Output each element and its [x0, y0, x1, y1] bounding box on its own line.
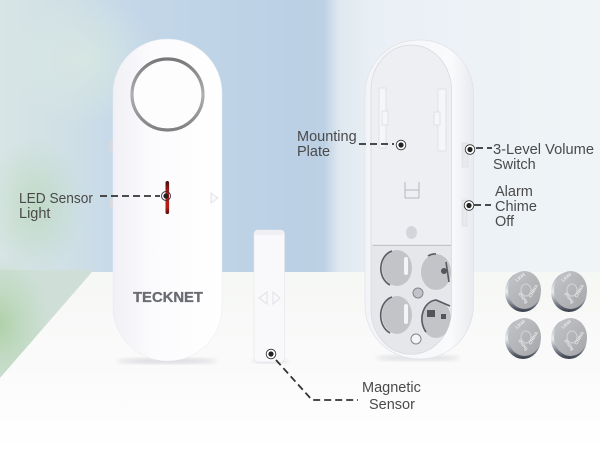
panel: back of alarm unit — [365, 40, 474, 360]
icon: right arrow mark — [211, 193, 218, 203]
panel: LR44 coin batteries — [505, 271, 587, 359]
battery 3: LR44 — [514, 319, 526, 330]
battery compartment — [371, 245, 452, 354]
callout: Mounting Plate — [297, 129, 406, 160]
callout: Alarm Chime Off: Alarm — [495, 184, 533, 200]
logo: TECKNET: TECKNET — [133, 290, 203, 306]
callout: Magnetic Sensor — [266, 349, 421, 413]
panel: front alarm unit — [110, 39, 222, 363]
battery 1: 0%Hg — [517, 291, 529, 304]
battery 1 — [505, 271, 541, 312]
callout: Alarm Chime Off: Off — [495, 214, 515, 230]
battery 3 — [505, 318, 541, 359]
callout: 3-Level Volume Switch — [465, 142, 594, 173]
panel: magnetic sensor unit — [252, 230, 288, 362]
callout: LED Sensor Light: LED Sensor — [19, 191, 93, 207]
callout: Mounting Plate: Mounting — [297, 129, 357, 145]
battery 2: 0%Hg — [563, 291, 575, 304]
callout: Magnetic Sensor: Magnetic — [362, 380, 421, 396]
LED sensor light — [166, 181, 169, 214]
battery 2: CHINA — [574, 283, 585, 298]
callout: 3-Level Volume Switch: 3-Level Volume — [493, 142, 594, 158]
callout: LED Sensor Light: Light — [19, 206, 50, 222]
side switches — [462, 143, 468, 167]
battery 2: LR44 — [560, 272, 572, 283]
icon: left and right arrow marks — [259, 292, 280, 304]
mounting plate recess — [371, 45, 452, 245]
callout: Mounting Plate: Plate — [297, 144, 330, 160]
callout: 3-Level Volume Switch: Switch — [493, 157, 536, 173]
callout: Alarm Chime Off — [464, 184, 537, 230]
battery 4: CHINA — [574, 330, 585, 346]
battery 3: 0%Hg — [517, 338, 529, 351]
battery slots — [373, 243, 451, 338]
callout: LED Sensor Light — [19, 191, 170, 222]
centre screws — [413, 288, 423, 298]
battery 3: CHINA — [528, 330, 539, 346]
callout: Magnetic Sensor: Sensor — [369, 397, 415, 413]
battery 4: 0%Hg — [563, 338, 575, 351]
battery 1: LR44 — [514, 272, 526, 283]
icon: speaker ring — [132, 59, 203, 130]
screw hole — [406, 226, 417, 239]
battery 1: CHINA — [528, 283, 539, 298]
callout: Alarm Chime Off: Chime — [495, 199, 537, 215]
icon: H-shaped slot — [405, 182, 419, 198]
battery 2 — [551, 271, 587, 312]
mounting clips — [379, 88, 446, 151]
battery 4: LR44 — [560, 319, 572, 330]
battery 4 — [551, 318, 587, 359]
